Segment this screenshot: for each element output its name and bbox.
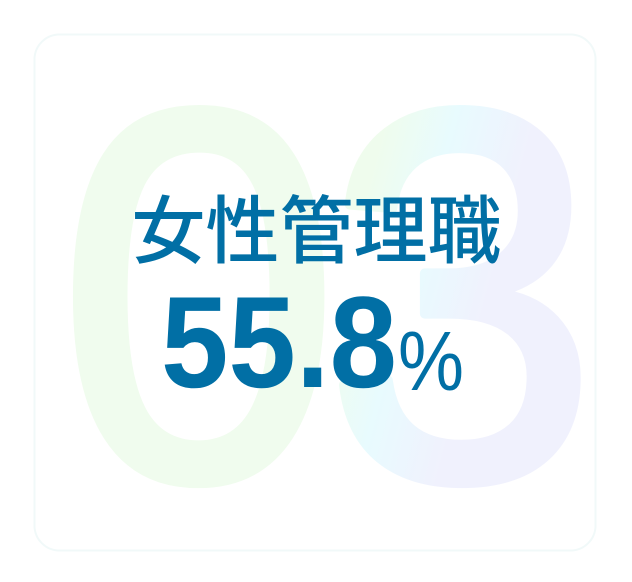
figure: 55.8%: %: [398, 314, 464, 408]
panel: card outline: [34, 34, 596, 550]
background numeral 03: 3: [325, 1, 598, 582]
background numeral 03: 0: [58, 2, 339, 582]
heading: 女性管理職: 女性管理職: [132, 190, 502, 273]
figure: 55.8%: 55.8: [161, 269, 397, 415]
